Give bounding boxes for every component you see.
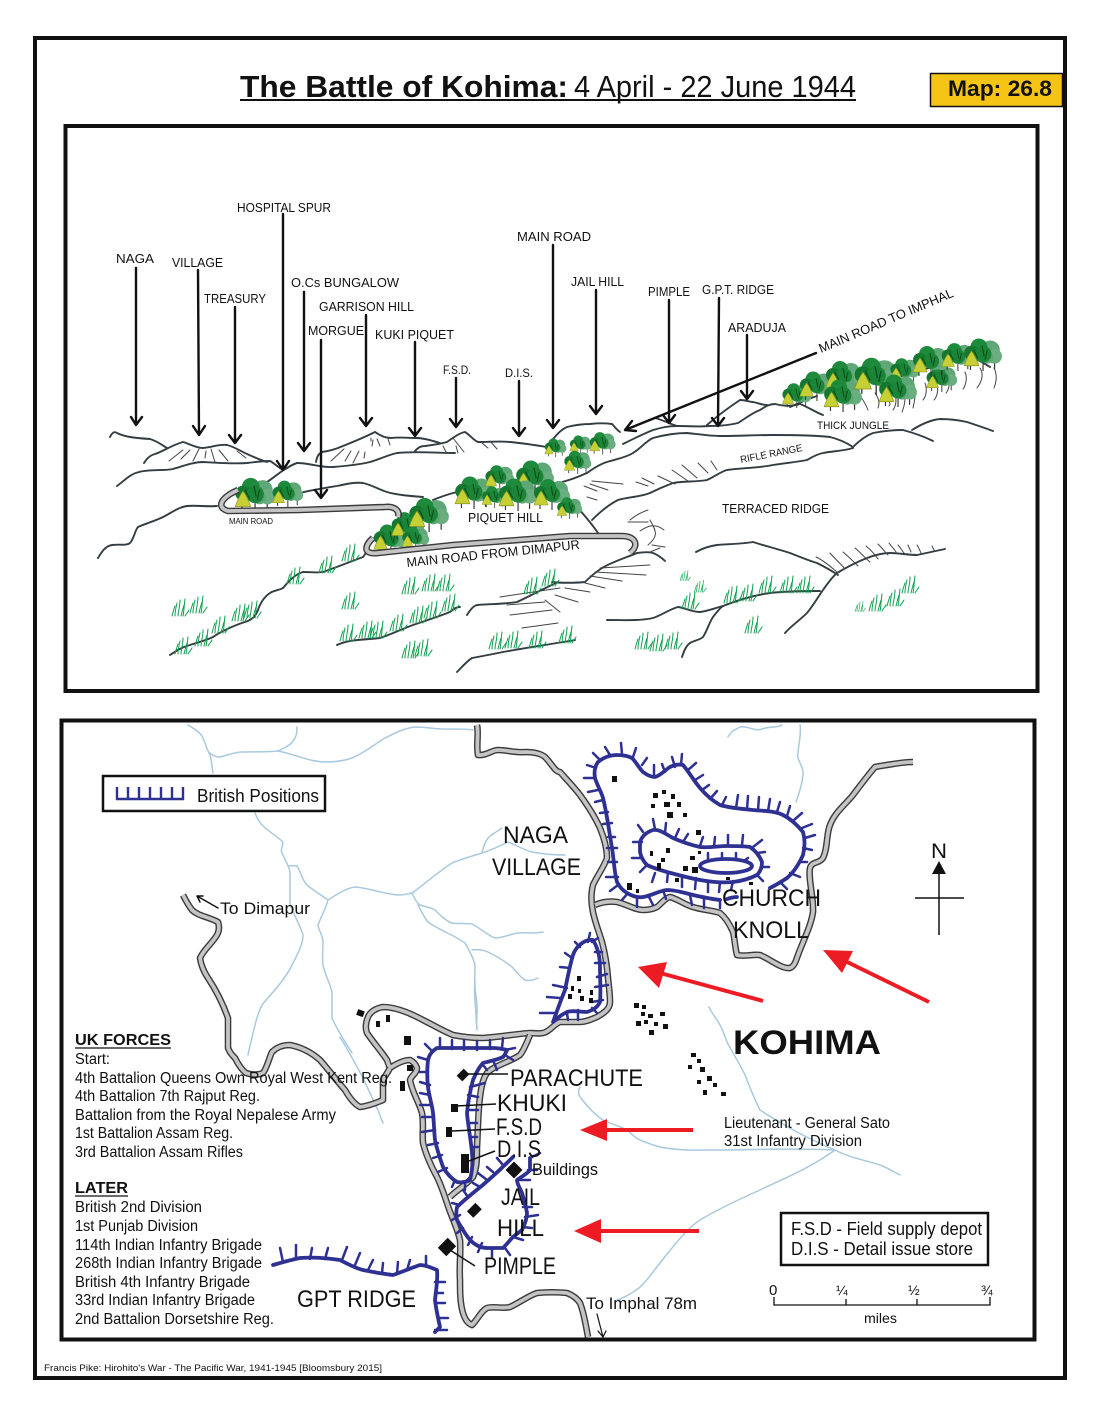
- main road from Dimapur: [366, 536, 635, 553]
- feature arrows: [131, 214, 816, 498]
- text block: UK forces: UK FORCES: [75, 1032, 171, 1049]
- scale bar: ½: [908, 1282, 920, 1298]
- British positions: Naga village hill: [584, 743, 815, 908]
- source credit: Francis Pike: Hirohito's War - The Pacific War, 1941-1945 [Bloomsbury 2015]: [44, 1363, 382, 1374]
- scale bar: [769, 1282, 993, 1326]
- place labels: JAIL: [501, 1184, 540, 1211]
- sketch labels: MAIN ROAD: [517, 229, 591, 244]
- map number badge: [930, 74, 1062, 106]
- text block: Japanese commander: [724, 1115, 890, 1150]
- upper main road: [221, 490, 398, 517]
- text block: UK forces: 33rd Indian Infantry Brigade: [75, 1292, 255, 1309]
- sketch labels: MAIN ROAD FROM DIMAPUR: [406, 537, 580, 570]
- road destination labels: To Dimapur: [220, 899, 310, 918]
- text block: UK forces: British 4th Infantry Brigade: [75, 1274, 250, 1291]
- text block: UK forces: [75, 1032, 392, 1328]
- sketch labels: THICK JUNGLE: [817, 420, 889, 432]
- sketch labels: TERRACED RIDGE: [722, 501, 829, 516]
- road destination labels: [197, 896, 697, 1337]
- trees: [235, 338, 1002, 554]
- place labels: PARACHUTE: [510, 1065, 643, 1092]
- text block: UK forces: LATER: [75, 1180, 128, 1197]
- red attack arrows: [574, 950, 929, 1243]
- place labels: KHUKI: [497, 1090, 567, 1117]
- text block: UK forces: 4th Battalion Queens Own Royal West Kent Reg.: [75, 1070, 392, 1087]
- sketch labels: VILLAGE: [172, 255, 223, 270]
- British positions: GPT Ridge: [273, 1245, 448, 1332]
- abbreviations box: D.I.S - Detail issue store: [791, 1239, 973, 1259]
- sketch labels: MORGUE: [308, 323, 364, 338]
- place labels: [297, 822, 881, 1313]
- sketch labels: KUKI PIQUET: [375, 327, 454, 342]
- sketch labels: ARADUJA: [728, 320, 786, 335]
- place labels: D.I.S: [497, 1136, 541, 1163]
- map number badge: Map: 26.8: [948, 76, 1052, 101]
- north arrow: N: [931, 840, 947, 863]
- text block: UK forces: 268th Indian Infantry Brigade: [75, 1255, 262, 1272]
- place labels: VILLAGE: [492, 854, 581, 881]
- text block: UK forces: 1st Punjab Division: [75, 1218, 198, 1235]
- text block: UK forces: British 2nd Division: [75, 1199, 202, 1216]
- British positions: northern spur hill: [540, 933, 608, 1022]
- sketch labels: PIMPLE: [648, 284, 690, 299]
- text block: UK forces: 2nd Battalion Dorsetshire Reg.: [75, 1311, 274, 1328]
- scale bar: ¾: [981, 1282, 993, 1298]
- legend: British positions: [103, 776, 325, 811]
- grass tufts: [172, 544, 919, 658]
- sketch labels: MAIN ROAD TO IMPHAL: [816, 285, 956, 356]
- north arrow: [915, 840, 964, 935]
- scale bar: ¼: [836, 1282, 848, 1298]
- road destination labels: To Imphal 78m: [586, 1294, 697, 1313]
- text block: UK forces: 4th Battalion 7th Rajput Reg.: [75, 1088, 260, 1105]
- title: 4 April - 22 June 1944: [574, 69, 856, 104]
- text block: UK forces: Start:: [75, 1051, 110, 1068]
- hachures: [169, 368, 996, 628]
- sketch terrain lines: [98, 358, 993, 672]
- place labels: F.S.D: [496, 1114, 542, 1141]
- place labels: KOHIMA: [733, 1024, 881, 1062]
- text block: Japanese commander: Lieutenant - General Sato: [724, 1115, 890, 1132]
- sketch labels: D.I.S.: [505, 366, 533, 380]
- title: [240, 69, 856, 104]
- sketch labels: GARRISON HILL: [319, 299, 414, 314]
- text block: UK forces: 114th Indian Infantry Brigade: [75, 1237, 262, 1254]
- sketch labels: RIFLE RANGE: [739, 443, 804, 466]
- British positions: Kuki Piquet / Garrison Hill: [418, 1038, 515, 1190]
- abbreviations box: F.S.D - Field supply depot: [791, 1219, 982, 1239]
- place labels: KNOLL: [733, 917, 809, 944]
- sketch labels: MAIN ROAD: [229, 517, 273, 526]
- sketch labels: G.P.T. RIDGE: [702, 282, 774, 297]
- sketch labels: [116, 200, 956, 570]
- place labels: NAGA: [503, 822, 568, 849]
- buildings: [356, 776, 753, 1266]
- place labels: HILL: [497, 1215, 544, 1242]
- place labels: Buildings: [532, 1161, 598, 1179]
- title: The Battle of Kohima:: [240, 69, 568, 104]
- text block: UK forces: Battalion from the Royal Nepalese Army: [75, 1107, 336, 1124]
- scale bar: 0: [769, 1282, 777, 1299]
- scale bar: miles: [864, 1310, 897, 1326]
- sketch labels: JAIL HILL: [571, 274, 624, 289]
- sketch labels: F.S.D.: [443, 363, 471, 377]
- legend: British positions: British Positions: [197, 786, 319, 806]
- sketch labels: HOSPITAL SPUR: [237, 200, 331, 215]
- rivers: [188, 725, 900, 1300]
- sketch labels: TREASURY: [204, 291, 266, 306]
- place labels: GPT RIDGE: [297, 1286, 416, 1313]
- panel: panoramic sketch of Kohima ridge: [66, 126, 1038, 691]
- text block: Japanese commander: 31st Infantry Division: [724, 1133, 862, 1150]
- British positions: Jail Hill: [452, 1153, 540, 1257]
- sketch labels: O.Cs BUNGALOW: [291, 275, 400, 290]
- abbreviations box: [781, 1213, 988, 1265]
- panel: battle map: [62, 720, 1034, 1340]
- sketch labels: NAGA: [116, 251, 154, 266]
- place labels: PIMPLE: [484, 1253, 556, 1280]
- text block: UK forces: 1st Battalion Assam Reg.: [75, 1125, 233, 1142]
- place labels: CHURCH: [722, 885, 821, 912]
- sketch labels: PIQUET HILL: [468, 510, 543, 525]
- text block: UK forces: 3rd Battalion Assam Rifles: [75, 1144, 243, 1161]
- roads: [183, 725, 913, 1337]
